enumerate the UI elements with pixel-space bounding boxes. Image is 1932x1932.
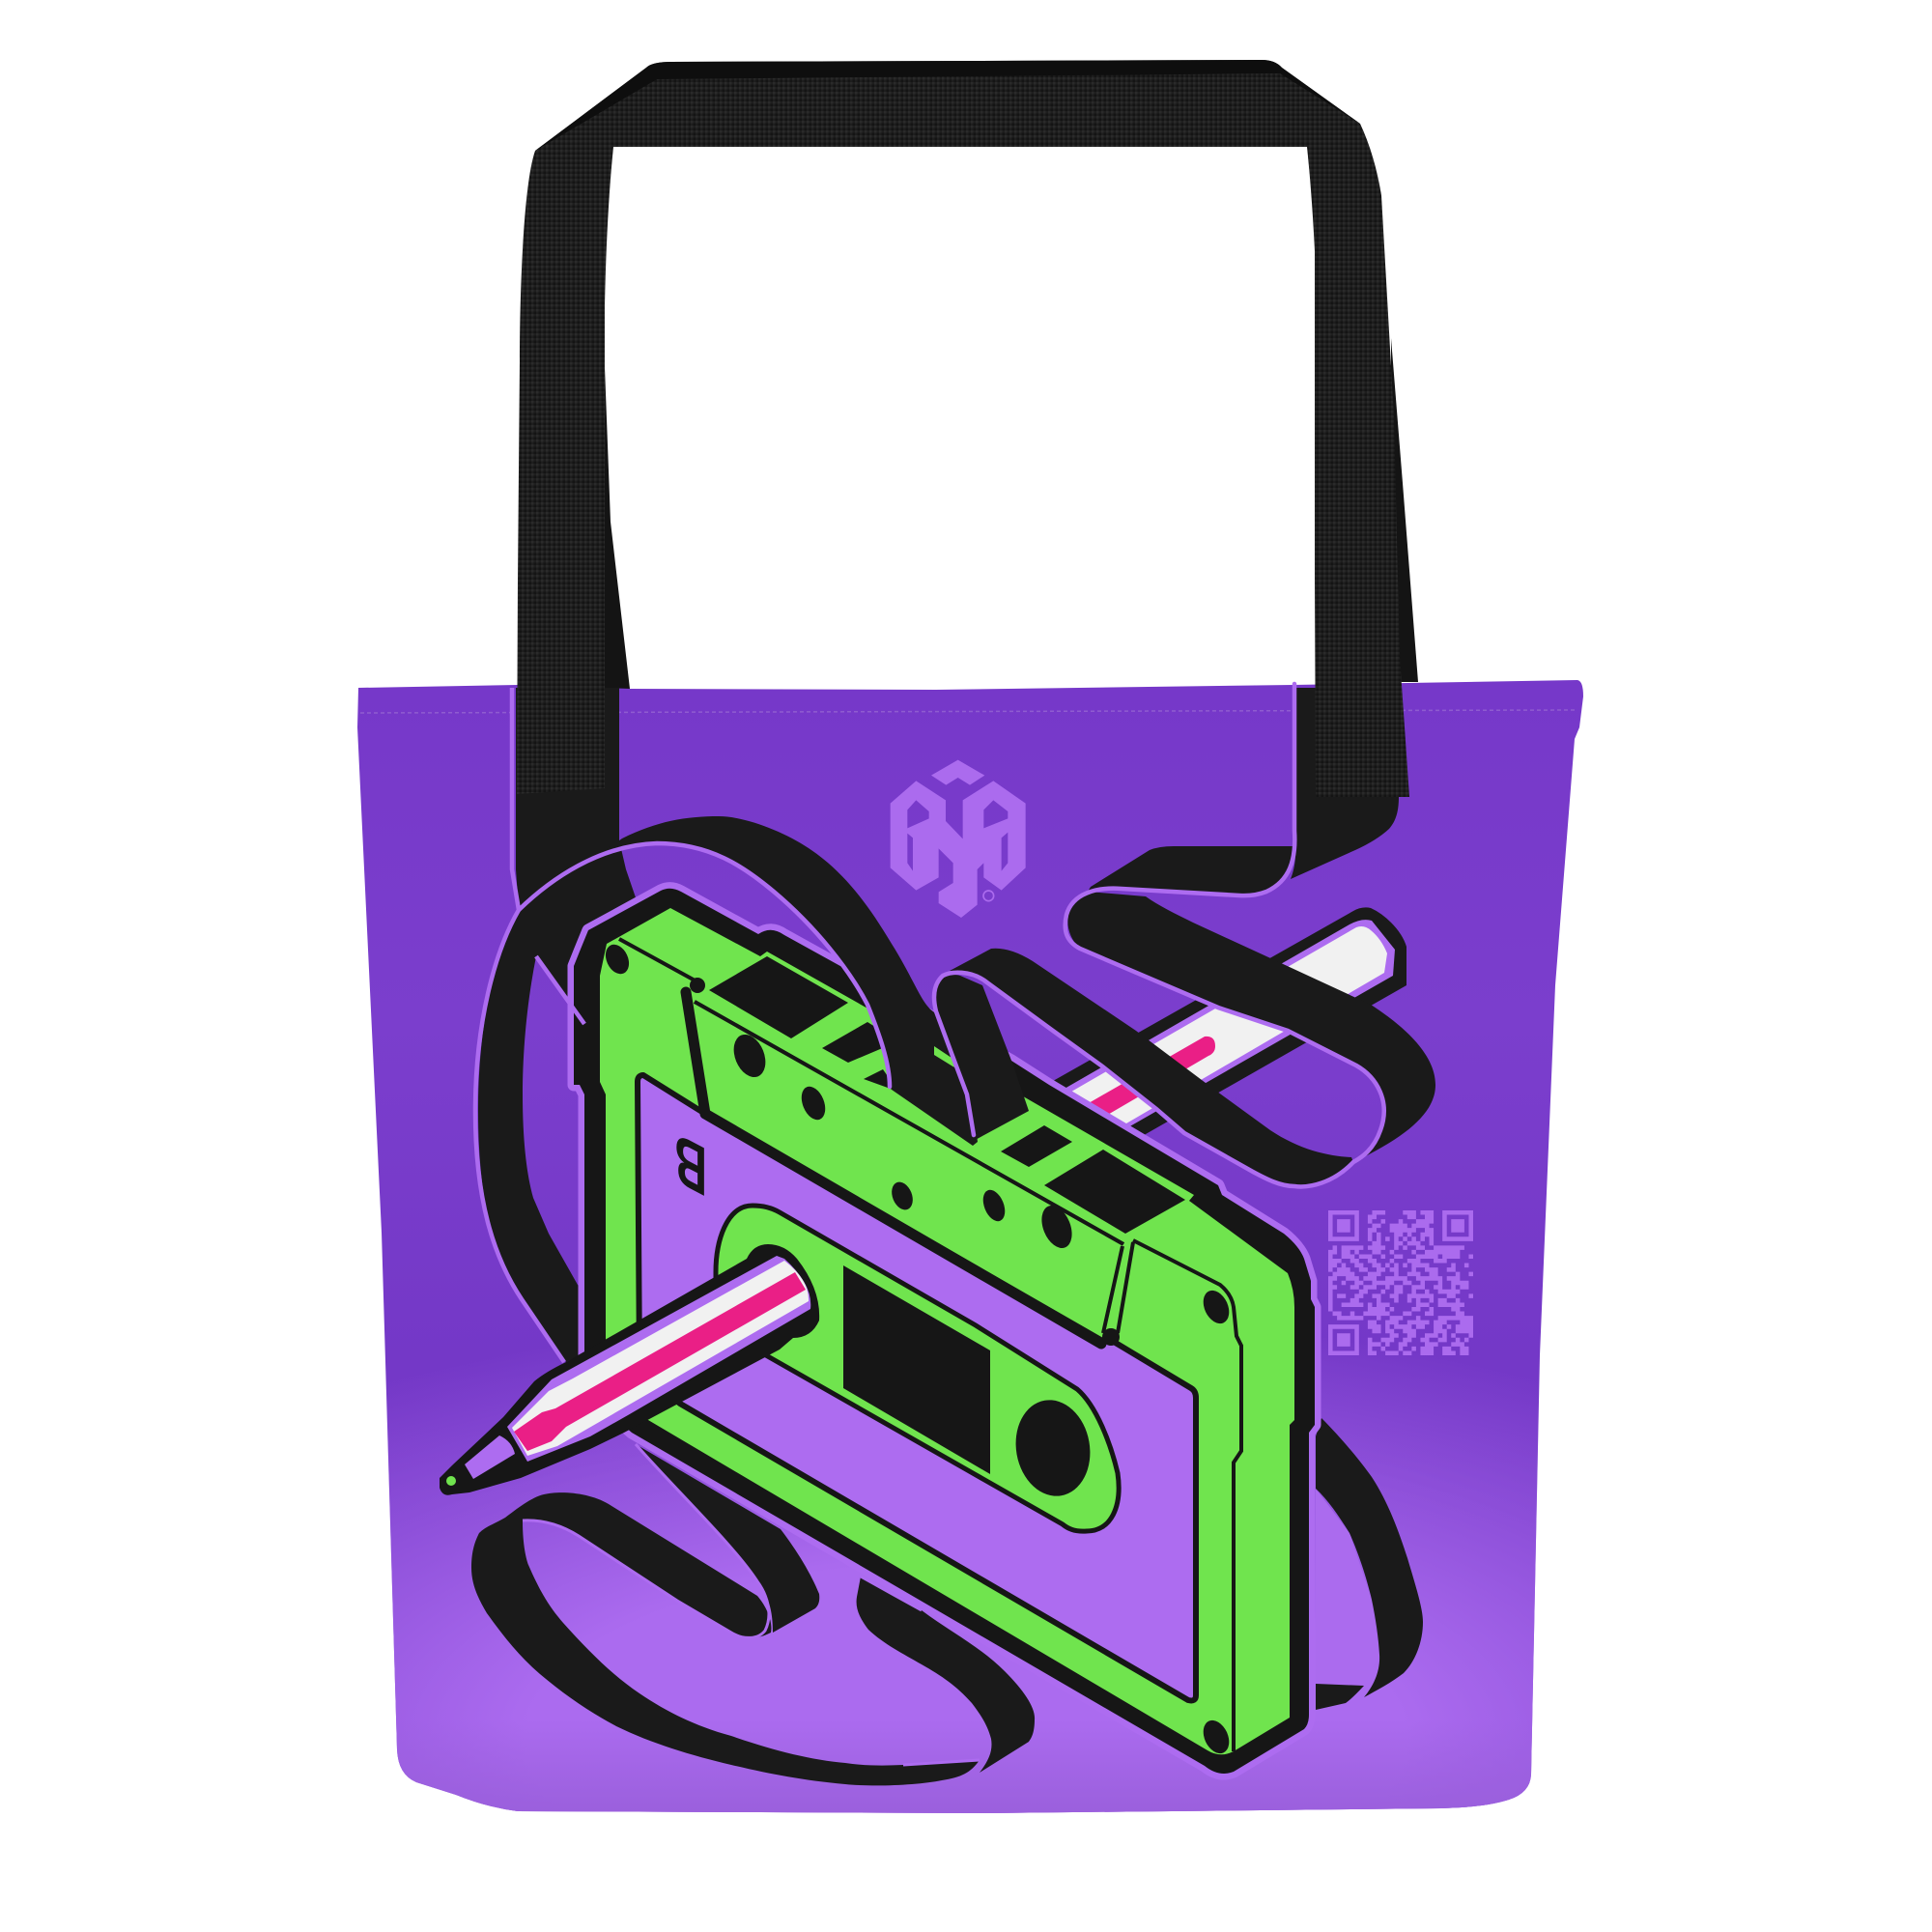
spool hole: [1009, 1394, 1097, 1502]
strip borders: [686, 992, 1101, 1344]
head opening strip: [695, 1002, 1123, 1338]
green sliver beside hook: [934, 1046, 954, 1067]
pencil tip: [465, 1435, 515, 1479]
cassette silhouette: [574, 889, 1315, 1774]
logo mark: [891, 760, 1026, 918]
QR code: [1328, 1212, 1473, 1353]
pencil body white: [512, 1261, 809, 1456]
right tail ribbon: [1316, 1418, 1423, 1697]
cassette: [574, 889, 1315, 1774]
right tail light area: [1316, 1489, 1379, 1686]
bottom tail ribbon: [857, 1577, 1035, 1773]
label side letter: B: [674, 1117, 707, 1211]
ribbon from cassette to loop: [636, 1444, 819, 1633]
hem stitching: [360, 710, 1577, 713]
arc lilac edge: [519, 843, 890, 1087]
tape arc: [519, 816, 978, 1146]
cassette shell lines: [619, 939, 1241, 1751]
bag body: [357, 680, 1583, 1813]
cassette label: [638, 1075, 1196, 1700]
logo: [891, 760, 1026, 918]
corner screws: [601, 941, 1234, 1757]
bag bottom shade: [396, 1719, 1532, 1813]
hook ribbon: [935, 975, 1029, 1143]
pencil pink stripe: [514, 1272, 806, 1451]
ribbon band lower: [950, 949, 1353, 1186]
strip side lines: [695, 1002, 1133, 1333]
pencil rear white: [1060, 926, 1387, 1130]
pencil rear lilac: [1051, 920, 1395, 1135]
window panel: [716, 1206, 1119, 1531]
left lilac edge: [475, 688, 584, 1362]
ribbon band upper loop: [1067, 892, 1435, 1162]
pencil rear section: [1046, 907, 1406, 1138]
rear handle straps: [599, 338, 1418, 689]
strip knob right: [1102, 1328, 1120, 1346]
lower loop ribbon: [471, 1492, 980, 1785]
handle straps: [517, 60, 1409, 797]
registered mark: [983, 891, 994, 901]
ribbon tail to strap: [1291, 688, 1399, 879]
pencil front section: [440, 1244, 819, 1495]
bag base colour: [357, 680, 1583, 1813]
lower ribbons lilac edge: [523, 1444, 980, 1765]
lower tape ribbons: [471, 1418, 1423, 1785]
ribbon top band: [1088, 846, 1296, 895]
tape window: [843, 1265, 990, 1474]
pencil body lilac: [507, 1256, 810, 1462]
bag lighter lower glow: [357, 680, 1583, 1813]
cassette green shell: [600, 908, 1294, 1754]
strap top fold: [535, 60, 1360, 151]
top edge slots: [709, 956, 1185, 1234]
pencil green dot: [446, 1476, 456, 1486]
strip knob left: [690, 978, 705, 993]
pencil rear outline: [1046, 907, 1406, 1138]
strip holes: [727, 1030, 1078, 1253]
pencil rear pink stripe: [1075, 1037, 1215, 1122]
S ribbon lilac edge: [934, 684, 1384, 1186]
pencil outline: [440, 1244, 819, 1495]
right tail end piece: [1316, 1684, 1364, 1710]
tape behind cassette left: [478, 688, 638, 1362]
tape over cassette: [475, 684, 1435, 1362]
strap webbing: [517, 60, 1409, 797]
